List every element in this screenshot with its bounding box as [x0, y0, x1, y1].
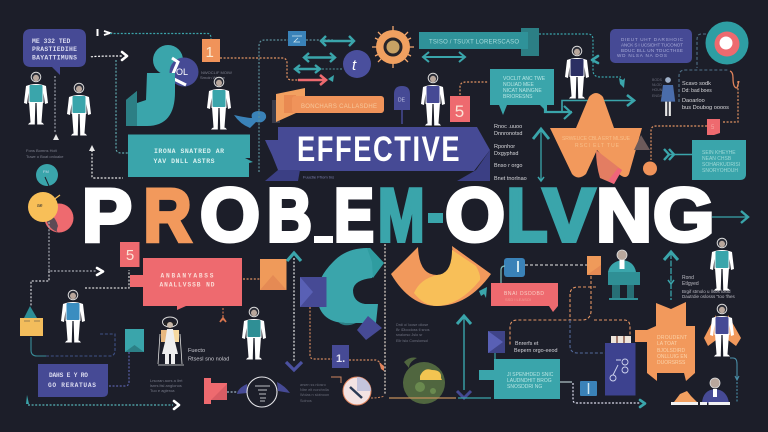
text: caption under coral box: Fuecto: [188, 348, 205, 354]
text: vertical gray: HOUN: [652, 88, 663, 92]
text: middle list: Bnet tnorlnao: [494, 176, 527, 182]
icon: winged circle: [237, 377, 290, 407]
icon: navy pin: [394, 86, 410, 124]
heading: problem-solving big title: [82, 174, 714, 258]
box: navy step 1: 1.: [336, 353, 345, 365]
panel: coral box: [130, 258, 242, 310]
panel: teal lower box: JI SPENHDED SNIC: [507, 372, 554, 378]
connector: white dotted bracket: [85, 270, 129, 288]
panel: teal lower box: SNOSDDRI NG: [507, 384, 542, 390]
panel: coral label: SSD I LEASOI: [505, 297, 531, 302]
icon: blue rounded box: [504, 258, 525, 277]
text: middle list: Bnso r orgo: [494, 163, 522, 169]
arrow: top dotted connector: [98, 29, 211, 39]
connector: dotted teal to circle: [322, 68, 342, 70]
shape: orange star: [550, 93, 650, 184]
panel: navy speech bubble: BAYATTIMUNS: [32, 54, 77, 62]
icon: left teal bubble: FM: [43, 169, 49, 174]
icon: blue small box: [580, 381, 597, 396]
box: coral small: 5: [711, 125, 715, 131]
panel: coral box: ANBANYABSS: [160, 272, 214, 280]
icon: navy circle: OL: [176, 67, 188, 77]
text: bottom gray caption: Tuo e agleroa: [150, 388, 175, 393]
connector: white dotted divider: [384, 244, 386, 395]
text: gray block: Solnos: [300, 399, 312, 403]
text: right caption: Dautrdie oslosss "too 'lhes: [682, 294, 735, 299]
connector: teal dotted: [116, 60, 128, 153]
text: right list: [682, 81, 729, 111]
text: bottom-left gray block: snalorso Jslo sr: [396, 333, 423, 337]
text: vertical gray: ENGH: [652, 94, 663, 98]
figure: small navy person: [661, 77, 675, 116]
box: coral step 5 lower: [120, 242, 140, 267]
text: right caption: Rond: [682, 275, 694, 281]
text: middle list: Rponhor: [494, 144, 515, 150]
arrow: teal double: [423, 52, 465, 62]
connector: navy teal bracket: [31, 334, 115, 356]
connector: orange dashes: [460, 82, 488, 95]
arrow: vertical double: [286, 253, 302, 370]
icon: navy disc: t: [352, 57, 357, 74]
text: gray block: arsen ss nlosro: [300, 383, 326, 387]
connector: white dashed: [525, 264, 587, 266]
panel: teal speech box: BRIORESNS: [503, 94, 533, 100]
icon: coral flag: [204, 378, 227, 404]
panel: navy speech bubble: [23, 29, 86, 75]
figure: person 3: [207, 77, 231, 130]
figure: person navy: [421, 73, 445, 126]
icon: teal virus badge: [706, 22, 748, 64]
box: navy step 1: [332, 345, 349, 368]
text: right list: bus Doubog oooos: [682, 105, 729, 111]
arrows: teal double arrows: [295, 36, 354, 73]
panel: orange house block: BJOLSDIRD: [657, 348, 685, 354]
icon: orange heap: [674, 391, 697, 402]
arrow: teal to right box: [664, 149, 692, 160]
figure: person 2: [67, 83, 91, 136]
text: gray block: Wolas n slotnoon: [300, 393, 329, 397]
box: orange step 1: 1: [206, 44, 214, 61]
figure: seated person at desk: [608, 250, 640, 299]
panel: orange house block: LA TOAT: [657, 341, 677, 347]
panel: teal speech box: NICAT NAINGNE: [503, 88, 542, 94]
icon: yellow face: [28, 192, 60, 222]
panel: navy speech bubble: ME 332 TED: [32, 38, 71, 45]
arrow: bottom teal dotted: [26, 395, 179, 409]
text: left caption: Fons Bomns Holt: [26, 148, 58, 153]
connector: blue to coral: [501, 266, 505, 283]
panel: teal box: [128, 134, 253, 177]
panel: teal speech box: NOLIAD MEE: [503, 82, 535, 88]
banner: teal top: TSISO / TSUXT LORERSCASO: [429, 40, 519, 46]
banner: teal top: [419, 28, 539, 56]
panel: right teal box: SOHARKUDRISI: [702, 162, 740, 168]
panel: orange ribbon: BONCHARS CALLASDHE: [301, 104, 377, 110]
text: bottom-left gray block: Ellr lslo Conslonsol: [396, 339, 428, 343]
icon: teal circle: [153, 45, 183, 75]
text: small caption: Srnoln W stee: [200, 75, 226, 80]
panel: orange house block: DROUDENT: [657, 335, 687, 341]
connector: white dotted left: [31, 222, 103, 306]
icon: small teal arrowhead: [328, 75, 334, 82]
text: bottom gray caption: [150, 378, 183, 393]
connector: small navy: [494, 353, 496, 359]
heading: problem-solving big title: V: [543, 174, 595, 258]
text: right caption: [682, 275, 735, 299]
text: right caption: Brgif stmolo u llsos lolod: [682, 289, 731, 294]
text: bottom-left gray block: Drdi o/ loose oliose: [396, 323, 428, 327]
panel: coral label: [491, 283, 558, 312]
shape: eye: [391, 246, 491, 306]
panel: teal box: YAV DNLL ASTRS: [154, 158, 215, 165]
arrow: vertical teal navy: [457, 316, 471, 398]
connector: blue right: [730, 358, 739, 402]
heading: problem-solving big title: R: [144, 174, 192, 258]
panel: orange house block: ONLLUIG EN: [657, 354, 688, 360]
connector: dash to circle: [227, 391, 246, 393]
icon: coral disc: [44, 204, 74, 233]
figure: dark person: [565, 46, 589, 98]
panel: navy device: [605, 336, 636, 396]
text: vertical gray: [652, 78, 663, 98]
text: caption beside pentagon: Bepern orgo-eeod: [514, 348, 557, 354]
icon: teal arrowhead: [479, 287, 487, 298]
arrow: dotted up from bubble: [53, 76, 59, 140]
icon: left teal bubble: [36, 164, 58, 186]
text: left caption: [26, 148, 64, 159]
text: vertical gray: NLOD: [652, 83, 662, 87]
text: gray block: Ntre elt norchnlla: [300, 388, 330, 392]
text: caption under coral box: Rtsesl sno nolad: [188, 356, 229, 362]
heading: EFFECTIVE: EFFECTIVE: [297, 130, 461, 169]
heading: problem-solving big title: G: [653, 174, 714, 258]
figure: presenter at bottom: [702, 378, 729, 403]
text: right list: Dd: bad boes: [682, 88, 712, 94]
panel: navy text box: WD NLSA NA DOS: [617, 53, 667, 58]
arrow: teal up: [664, 252, 678, 300]
icon: teal bookmark: [125, 329, 144, 352]
text: middle list: [494, 124, 527, 182]
shape: orange star: SRWEUCE CBLA ERT MLSUE: [562, 136, 631, 142]
icon: blue square: [288, 31, 306, 46]
text: middle list: Dnnronotsd: [494, 131, 522, 137]
panel: navy text box: DIEUT UHT DARSHOIC: [621, 37, 684, 42]
text: bottom gray caption: Lrsoran aors a llrrt: [150, 378, 183, 383]
text: bottom-left gray block: Br lDloodoss tl snos: [396, 328, 430, 332]
connector: orange right: [651, 71, 739, 160]
heading: problem-solving big title: L: [506, 174, 548, 258]
text: middle list: Rnoc .uuoo: [494, 124, 522, 130]
connector: orange and navy dashed loop: [510, 276, 630, 353]
text: caption beside pentagon: Bnrerfs et: [515, 341, 539, 347]
figure: person 1: [24, 72, 48, 124]
shape: teal C: [317, 248, 384, 340]
panel: right teal box: [692, 140, 746, 180]
icon: orange block: [587, 256, 601, 275]
figure: person teal lower: [242, 307, 266, 360]
heading: problem-solving big title: O: [200, 174, 260, 258]
heading: problem-solving big title: N: [596, 174, 652, 258]
bar: white base: [671, 402, 730, 405]
arrow: coral: [298, 75, 326, 85]
arrow: teal to star: [545, 95, 634, 119]
panel: navy text box: [610, 29, 692, 63]
arrow: teal vertical: [533, 128, 549, 181]
panel: navy text box: ANCK S I UCSIDHT TUCONOT: [621, 42, 683, 48]
heading: problem-solving big title: E: [334, 174, 374, 258]
connector: orange elbow: [331, 377, 384, 398]
text: bottom gray caption: lsnrs ltsl anglonos: [150, 383, 182, 388]
box: coral small: [707, 119, 720, 135]
text: small caption: [200, 70, 232, 80]
box: coral step 5: [450, 96, 470, 122]
icon: navy pentagon: [488, 331, 505, 353]
panel: navy box lower: [38, 364, 108, 397]
text: left caption: Tuwe o Boat onloake: [26, 154, 64, 159]
icon: orange chevron: [379, 362, 384, 371]
icon: navy circle: [162, 58, 198, 86]
heading: problem-solving big title: B: [267, 174, 312, 258]
text: small caption: NWOCLIF MOIW: [201, 70, 232, 75]
text: bottom-left gray block: [396, 323, 430, 343]
arrow: title right: [712, 211, 748, 223]
box: orange step 1: [202, 39, 220, 62]
text: vertical gray: BODS: [652, 78, 663, 82]
icon: yellow bag: [20, 306, 43, 336]
panel: teal lower box: [479, 359, 560, 399]
icon: orange sun: [372, 26, 414, 68]
icon: navy pin: DE: [398, 98, 406, 104]
text: caption beside pentagon: [514, 341, 557, 354]
panel: navy box lower: GO RERATUAS: [48, 382, 96, 389]
arrow: small orange up: [220, 308, 226, 322]
text: ribbon subcaption: Fuuctie Ffrom tns: [303, 174, 334, 180]
icon: navy square: [300, 277, 326, 307]
panel: teal box: IRONA SNATRED AR: [154, 148, 224, 155]
icon: orange square: [260, 259, 286, 290]
connector: top teal vertical: [259, 40, 333, 172]
icon: green globe: [403, 358, 445, 404]
text: right caption: Etlgyed: [682, 281, 699, 287]
icon: orange dot: [643, 162, 657, 176]
connector: navy dashed: [679, 34, 728, 102]
box: coral step 5: 5: [455, 102, 464, 121]
icon: navy disc: [343, 50, 371, 78]
icon: blue bird: [234, 111, 266, 128]
shape: orange star: RSCI ELT TUE: [575, 143, 620, 149]
connector: bottom line: [389, 397, 491, 399]
arrow: left dotted bracket: [89, 145, 123, 178]
panel: right teal box: NEAN CHSB: [702, 156, 732, 162]
heading: problem-solving big title: O: [445, 174, 505, 258]
arrow: bottom dotted: [560, 382, 645, 407]
text: right list: Daoarloo: [682, 98, 705, 104]
connector: orange dash under square: [310, 307, 381, 366]
figure: caped person: [704, 304, 741, 356]
panel: coral box: ANALLVSSB ND: [160, 282, 215, 288]
arrow: white dotted: [91, 52, 127, 60]
panel: navy box lower: DAHS E Y RO: [49, 372, 88, 379]
text: middle list: Dxgyphsd: [494, 151, 518, 157]
panel: orange house block: [635, 302, 695, 381]
panel: coral label: BNAI DSDDBD: [504, 291, 544, 297]
figure: person blue: [61, 290, 85, 342]
connector: teal dashed top: [539, 34, 625, 88]
icon: medical disc: [343, 377, 371, 405]
panel: right teal box: SEIN KHEYHE: [702, 150, 736, 156]
panel: teal lower box: LAUDNDHIT BROG: [507, 378, 552, 384]
connector: orange dotted: [220, 58, 298, 80]
text: gray block: [300, 383, 330, 403]
figure: person with stand: [158, 317, 184, 365]
panel: teal speech box: VOCLIT ANC TWE: [503, 76, 546, 82]
panel: teal speech box: [490, 69, 554, 115]
connector: navy dotted: [108, 352, 129, 386]
connector: orange dash: [243, 278, 260, 280]
text: right list: Scavo sodk: [682, 81, 711, 87]
heading: problem-solving big title: P: [82, 174, 132, 258]
box: coral step 5 lower: 5: [126, 247, 134, 264]
heading: problem-solving big title: M: [378, 174, 424, 258]
figure: person right top: [710, 238, 734, 290]
panel: navy text box: BDUC BLL UN TDUCTHSE: [621, 48, 683, 53]
text: caption under coral box: [188, 348, 229, 362]
shape: teal J: [126, 73, 175, 126]
panel: orange ribbon: [272, 88, 384, 123]
panel: navy speech bubble: PRASTIEDIHE: [32, 46, 77, 53]
panel: orange house block: DUORSRSS: [657, 360, 686, 366]
icon: yellow face: ae: [37, 203, 43, 209]
panel: title ribbon: [265, 127, 490, 181]
panel: right teal box: SNORYOHDUH: [702, 168, 738, 174]
